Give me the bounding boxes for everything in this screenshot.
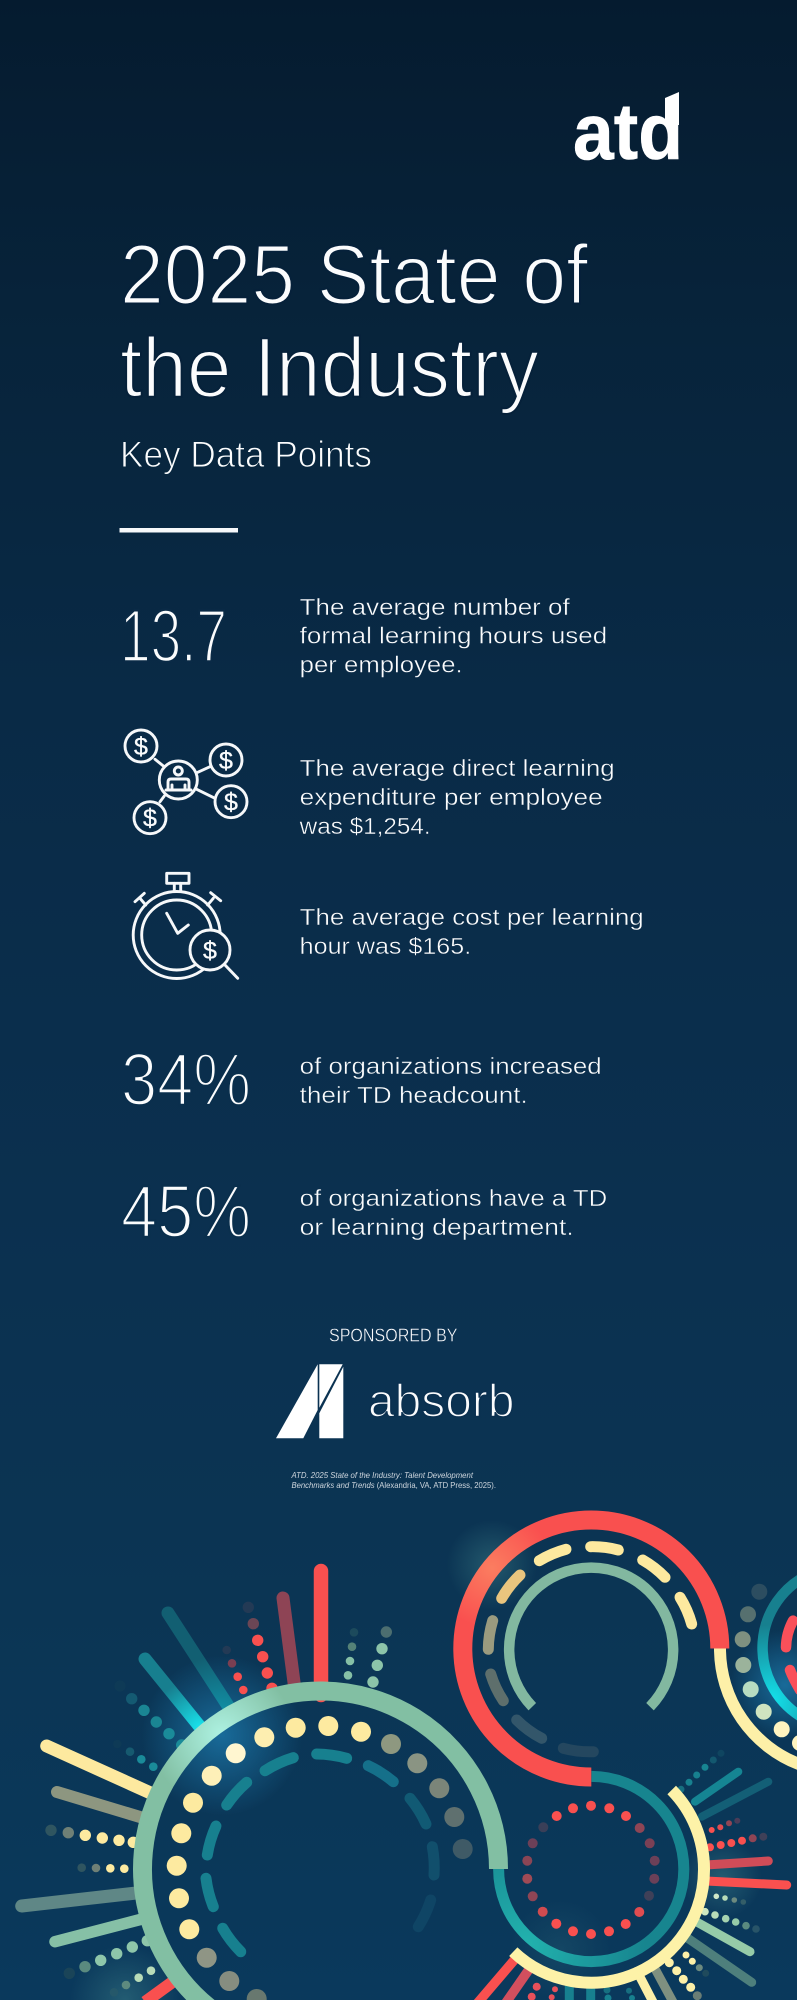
logo: absorb (276, 1364, 514, 1438)
icon: person connected to dollar coins (125, 730, 247, 834)
icon: stopwatch with magnifier (133, 873, 238, 978)
rays around lower right ring (477, 1772, 787, 2000)
red ring (463, 1520, 720, 1777)
stat number 45%: 45% (121, 1170, 251, 1253)
stat description: The average direct learning (300, 755, 615, 781)
citation: Benchmarks and Trends (Alexandria, VA, ATD Press, 2025). (292, 1481, 496, 1490)
sponsor block (276, 1324, 514, 1490)
heading rule (120, 528, 238, 532)
stat description: their TD headcount. (300, 1082, 528, 1108)
teal arc (763, 1574, 797, 1716)
title (120, 228, 589, 414)
red ring: inner green arc (509, 1568, 673, 1707)
icon: person connected to dollar coins: $ (143, 805, 157, 833)
stat description: of organizations increased (300, 1053, 602, 1079)
stat description: The average cost per learning (300, 904, 644, 930)
far right ring (720, 1574, 797, 1764)
red ring: yellow dashes (488, 1547, 692, 1752)
red dashes (786, 1621, 797, 1690)
stat row: direct learning expenditure (125, 730, 615, 839)
rays around large ring (22, 1571, 321, 2000)
icon: person connected to dollar coins: $ (134, 733, 148, 761)
large ring: yellow dots (167, 1716, 473, 2000)
citation (291, 1471, 496, 1490)
icon: person connected to dollar coins: $ (219, 747, 233, 775)
decorative art: concentric rings and rays (22, 1520, 797, 2000)
lower right ring: teal arc (499, 1776, 684, 1962)
title: 2025 State of (120, 228, 589, 322)
fading dots (735, 1584, 797, 1751)
stat row: TD headcount (121, 1038, 602, 1121)
subtitle: Key Data Points (120, 434, 372, 475)
stat row: formal learning hours (120, 594, 607, 678)
dotted rays around large ring (45, 1602, 392, 1997)
stat description (300, 904, 644, 959)
stat description (300, 1185, 607, 1240)
stat description: or learning department. (300, 1214, 574, 1240)
cream arc (720, 1648, 797, 1764)
stat row: TD or learning department (121, 1170, 607, 1253)
stat number 34%: 34% (121, 1038, 251, 1121)
logo: absorb: absorb (368, 1374, 514, 1426)
stat description: hour was $165. (300, 933, 471, 959)
stat description: The average number of (300, 594, 570, 620)
logo: atd: atd (573, 87, 683, 176)
header (120, 228, 589, 532)
stat number 13.7: 13.7 (120, 594, 227, 678)
stat description: was $1,254. (299, 813, 431, 839)
icon: stopwatch with magnifier: $ (203, 937, 217, 965)
large ring: teal dashes (206, 1754, 434, 1952)
stat description: of organizations have a TD (300, 1185, 607, 1211)
stat description (300, 1053, 602, 1108)
icon: person connected to dollar coins: $ (224, 789, 238, 817)
lower right ring: red dots (522, 1801, 660, 1939)
large ring: sage green (143, 1691, 499, 2000)
stat description (299, 755, 615, 839)
citation: ATD. 2025 State of the Industry: Talent Development (291, 1471, 474, 1480)
title: the Industry (120, 320, 539, 414)
sponsored by label: SPONSORED BY (329, 1324, 458, 1346)
dotted rays around lower right ring (528, 1750, 767, 2000)
stat row: cost per learning hour (133, 873, 644, 978)
stat description: expenditure per employee (300, 784, 603, 810)
background glows (70, 1520, 797, 2000)
stat description: per employee. (300, 652, 463, 678)
stat description: formal learning hours used (300, 622, 607, 648)
stat description (300, 594, 607, 678)
lower right ring: cream arc (513, 1790, 704, 1983)
